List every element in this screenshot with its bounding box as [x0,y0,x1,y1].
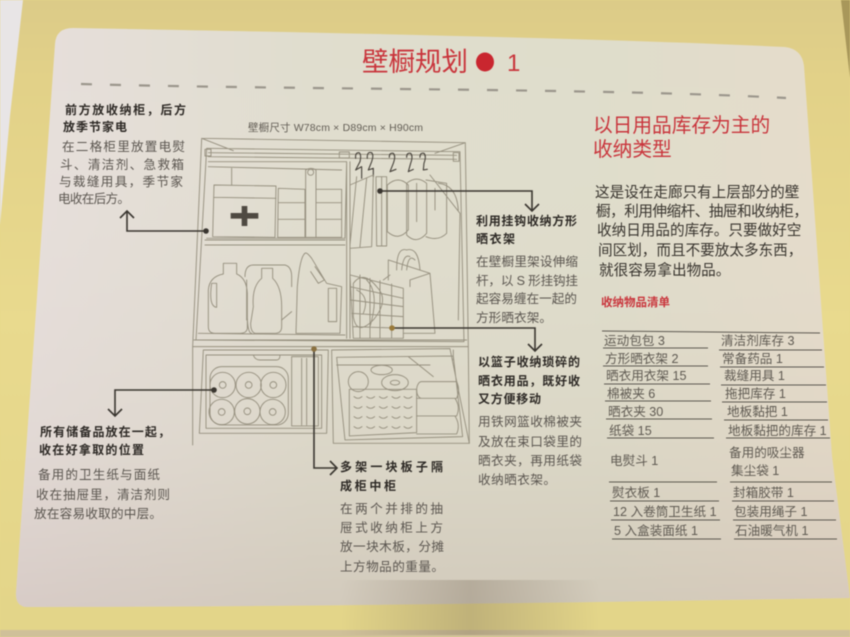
right column: 地板黏把 1 [727,405,788,419]
text block: front cabinet [58,102,186,206]
iron [282,253,342,333]
basket and towels [337,357,459,436]
text block: hooks: 利用挂钩收纳方形 [476,213,577,228]
right column: 拖把库存 1 [725,386,786,401]
text block: hooks [476,213,578,325]
bottom right drawer [332,349,469,443]
text block: supplies: 备用的卫生纸与面纸 [38,467,160,482]
upper left shelf [198,162,350,338]
description paragraph: 收纳日用品的库存。只要做好空 [597,222,801,239]
text block: hooks: 起容易缠在一起的 [476,291,577,306]
size caption: 壁橱尺寸 W78cm × D89cm × H90cm [248,121,423,134]
wardrobe frame [193,138,469,445]
text block: board: 上方物品的重量。 [340,559,444,574]
text block: hooks: 方形晒衣架。 [476,310,552,325]
right column: 备用的吸尘器 [729,445,805,460]
title: 1 [507,50,520,77]
right column: 集尘袋 1 [731,463,779,478]
text block: board: 成柜中柜 [340,478,396,493]
text block: supplies: 放在容易收取的中层。 [34,506,162,521]
first aid box [213,185,276,237]
text block: front cabinet: 前方放收纳柜，后方 [65,102,186,117]
text block: front cabinet: 与裁缝用具，季节家 [59,174,183,189]
description paragraph: 橱，利用伸缩杆、抽屉和收纳柜， [596,203,808,220]
text block: board: 多架一块板子隔 [340,459,443,474]
right column: 清洁剂库存 3 [721,333,794,348]
text block: supplies [34,424,170,521]
arrow: front cabinet callout [120,211,209,234]
text block: basket: 又方便移动 [478,391,541,406]
left column: 晒衣用衣架 15 [606,368,686,383]
left column [604,334,717,538]
text block: hooks: 杆，以 S 形挂钩挂 [476,274,578,288]
drawers and board [278,168,342,237]
description paragraph: 这是设在走廊只有上层部分的壁 [595,184,799,201]
heading: storage type: 以日用品库存为主的 [593,115,770,137]
right column: 裁缝用具 1 [724,368,785,383]
left column: 棉被夹 6 [607,387,655,401]
right column: 封箱胶带 1 [733,485,794,500]
title [362,47,520,77]
right column [721,333,827,538]
arrow: stock callout [108,387,217,416]
text block: basket: 以篮子收纳琐碎的 [478,354,580,369]
arrow: board callout [311,346,337,475]
hanging rail [205,149,459,161]
description paragraph [595,184,808,279]
text block: board: 屉式收纳柜上方 [340,520,443,535]
text block: basket [478,354,582,487]
text block: board: 在两个并排的抽 [340,501,443,516]
list heading: 收纳物品清单 [601,295,670,309]
description paragraph: 间区划，而且不要放太多东西， [598,242,802,259]
text block: front cabinet: 电收在后方。 [58,191,130,206]
toilet rolls [209,367,288,425]
text block: front cabinet: 放季节家电 [63,119,127,134]
text block: supplies: 收在抽屉里，清洁剂则 [36,488,170,502]
text block: front cabinet: 在二格柜里放置电熨 [62,139,185,154]
text block: hooks: 晒衣架 [476,231,515,246]
arrow: basket callout [389,325,542,351]
text block: basket: 及放在束口袋里的 [478,434,582,449]
left column: 晒衣夹 30 [608,404,663,419]
left column: 5 入盒装面纸 1 [614,523,698,538]
left column: 12 入卷筒卫生纸 1 [613,504,717,519]
right column: 石油暖气机 1 [735,523,808,538]
text block: supplies: 收在好拿取的位置 [39,442,144,457]
text block: basket: 收纳晒衣架。 [478,472,556,487]
description paragraph: 就很容易拿出物品。 [599,261,730,279]
text block: basket: 用铁网篮收棉被夹 [478,415,582,429]
text block: board: 放一块木板，分摊 [340,540,444,554]
text block: basket: 晒衣夹，再用纸袋 [478,453,582,468]
wardrobe illustration [193,138,469,445]
right column: 地板黏把的库存 1 [728,423,827,438]
bottom shadow [340,580,600,635]
arrow: hooks callout [377,188,539,211]
left column: 运动包包 3 [604,334,665,348]
text block: basket: 晒衣用品，既好收 [478,373,580,388]
title: 壁橱规划 [362,47,468,77]
text block: board [340,459,444,574]
left column: 电熨斗 1 [610,454,658,468]
left column: 纸袋 15 [609,424,652,438]
left column: 熨衣板 1 [612,485,660,500]
bottom left drawer [199,350,328,433]
text block: hooks: 在壁橱里架设伸缩 [476,254,578,269]
hanging racks and bags [350,175,460,320]
hooks [356,152,427,178]
text block: supplies: 所有储备品放在一起， [40,424,170,439]
heading: storage type: 收纳类型 [593,139,672,161]
left column: 方形晒衣架 2 [605,351,678,366]
text block: front cabinet: 斗、清洁剂、急救箱 [60,157,184,172]
right column: 常备药品 1 [722,352,783,366]
item table [602,331,837,539]
right column: 包装用绳子 1 [734,505,807,519]
detergent bottles [208,263,292,333]
dashed divider [81,84,786,98]
heading: storage type [593,115,770,161]
paper bag [388,250,435,333]
wire basket [350,275,403,338]
